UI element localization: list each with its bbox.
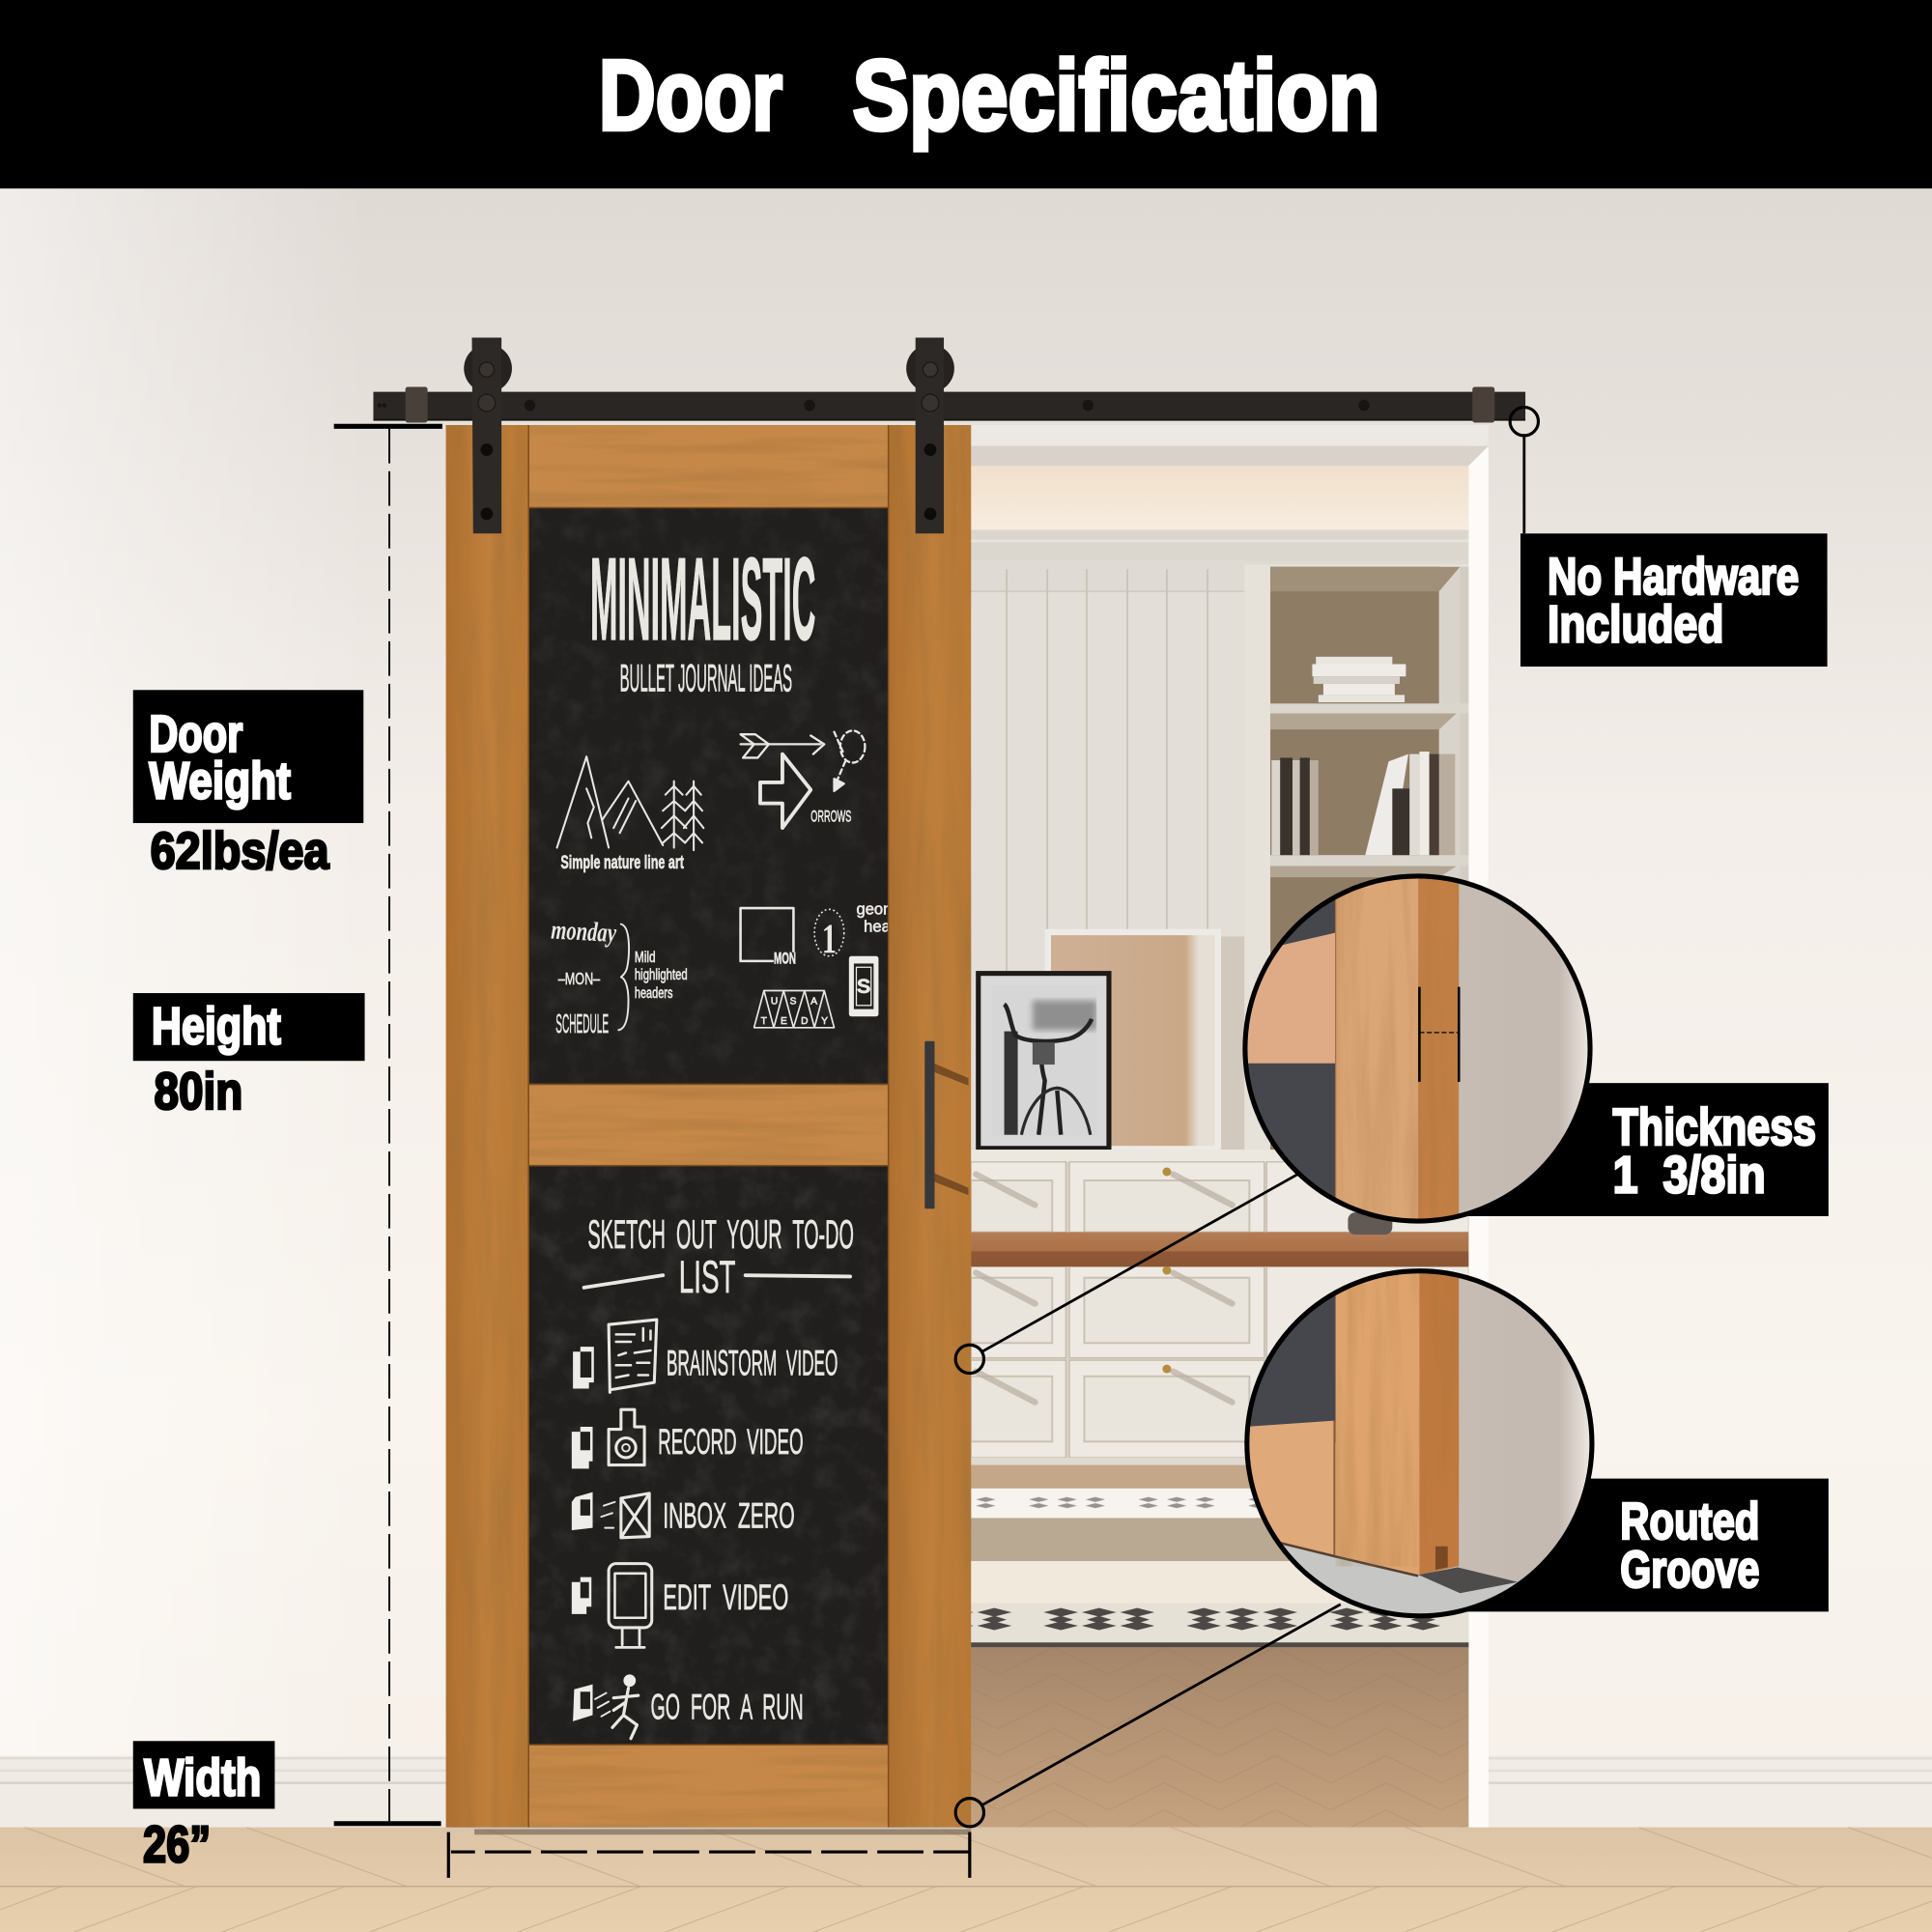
label: door weight: Door [149,706,242,763]
thickness dimension marks [1419,987,1459,1082]
chalkboard panel: upper [528,508,926,1084]
chalk headers: geometric: T [761,1016,767,1027]
title: Door [599,39,782,151]
leader line: thickness [955,1173,1300,1374]
hanger left [464,337,512,533]
room seen through the doorway [971,446,1468,1828]
chalk art: arrows [741,730,865,828]
chalk headers: geometric: Y [821,1016,828,1027]
chalkboard panel: lower: BRAINSTORM VIDEO [667,1343,838,1382]
text: MINIMALISTIC [590,533,815,665]
to-do: inbox zero: INBOX ZERO [663,1496,795,1536]
to-do: edit video: EDIT VIDEO [663,1577,788,1617]
title: Specification [853,39,1380,151]
sliding barn door track and hangers [373,337,1525,533]
value: width: 26” [143,1816,211,1873]
chalk heading: to-do [584,1211,854,1303]
beadboard wall [971,560,1244,1152]
chalk headers: geometric: geometric [856,899,926,918]
callout: no hardware included: No Hardware [1548,549,1799,606]
height dimension line [334,426,442,1824]
to-do: edit video [572,1564,788,1647]
label: height [133,993,365,1061]
chalk headers: geometric: E [781,1016,787,1027]
baseboard [0,1756,1932,1828]
door rails and stiles [446,425,971,1828]
chalk headers: monday list: headers [635,985,673,1002]
chalk headers: geometric: headers [864,917,922,935]
value: height: 80in [154,1064,242,1121]
title bar [0,0,1932,188]
to-do: record video [572,1409,804,1468]
callout: routed groove: Groove [1620,1542,1759,1599]
callout: thickness: 1 3/8in [1613,1148,1766,1205]
callout: thickness: Thickness [1613,1099,1816,1156]
to-do: record video: RECORD VIDEO [658,1422,804,1462]
barn door [446,425,971,1828]
magnifier: routed groove detail [1233,1270,1592,1627]
to-do: inbox zero [572,1492,795,1538]
chalk caption: nature: Simple nature line art [560,853,684,873]
doorway casing [971,425,1489,1828]
interior floor and rug [971,1458,1468,1828]
chalk heading: minimalistic [590,533,815,700]
chalk headers: geometric [741,899,926,1028]
callout: routed groove [1466,1479,1829,1611]
chalk headers: geometric: D [801,1016,808,1027]
to-do: go for a run [573,1674,804,1739]
chalk headers: geometric: S [857,974,870,998]
track bolts [378,400,1370,411]
chalk headers: monday list: monday [551,916,617,949]
to-do: go for a run: GO FOR A RUN [650,1687,804,1726]
wall art [976,929,1221,1151]
callout: routed groove: Routed [1620,1493,1759,1550]
label: door weight: Weight [149,753,291,810]
chalk headers: monday list: SCHEDULE [555,1009,609,1038]
chalk caption: arrows: ORROWS [810,808,851,826]
leader line: routed groove [955,1605,1341,1827]
door pull handle [924,1041,969,1208]
chalk headers: geometric: U [771,997,778,1008]
label: width: Width [144,1749,261,1806]
chalk headers: monday list: highlighted [635,967,688,983]
to-do: brainstorm video [573,1320,838,1392]
callout: thickness [1466,1083,1829,1216]
chalk art: mountains and trees [557,756,703,850]
books [1271,657,1455,855]
chalkboard panel: upper: BULLET JOURNAL IDEAS [620,658,792,700]
track stops [406,387,1494,423]
value: door weight: 62lbs/ea [151,823,330,880]
chalk headers: monday list: –MON– [558,969,600,988]
chalk headers: monday list [551,916,688,1038]
chalk headers: geometric: A [810,997,817,1008]
label: door weight [133,690,363,823]
magnifier: door thickness detail [1244,876,1592,1221]
chalk headers: monday list: Mild [635,950,656,966]
callout: no hardware included [1510,408,1828,667]
chalkboard panel: lower [528,1166,889,1745]
cabinets [971,1150,1468,1463]
callout: no hardware included: Included [1548,597,1723,654]
title [599,39,1380,151]
width dimension line [448,1833,970,1878]
label: height: Height [152,998,281,1055]
chalk headers: geometric: S [790,997,797,1008]
chalk headers: geometric: MON [774,949,796,967]
bookcase [1244,564,1468,1158]
chalk headers: geometric: 1 [822,916,837,962]
ceiling glow [971,466,1468,529]
chalkboard panel: lower: SKETCH OUT YOUR TO-DO [587,1211,854,1257]
hanger right [906,337,954,533]
floor [0,1828,1932,1932]
chalk heading: to-do: LIST [679,1252,735,1303]
